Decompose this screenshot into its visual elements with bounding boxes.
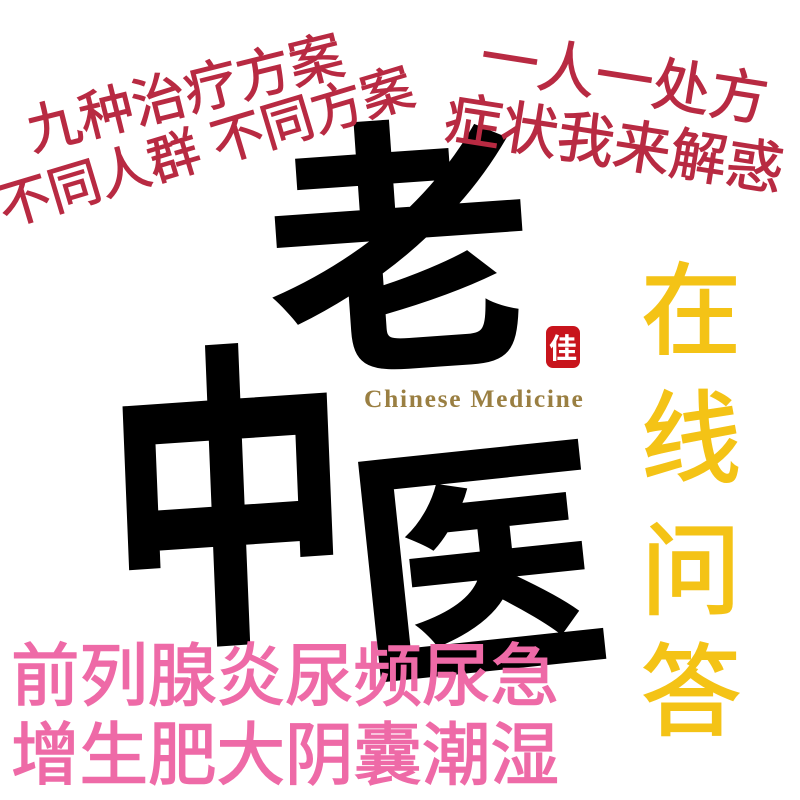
character: 问: 问 (641, 516, 741, 628)
red slogan: nine treatment plans: 九种治疗方案 (21, 26, 350, 162)
red slogan: different people, different plans: 不同人群 不同方案 (0, 59, 421, 238)
calligraphy: 老: 老 (252, 29, 546, 435)
character: 线: 线 (641, 384, 741, 496)
pink text line 2: 增生肥大阴囊潮湿 (11, 717, 559, 794)
calligraphy: 医: 医 (329, 349, 622, 742)
pink text line 1: 前列腺炎尿频尿急 (11, 638, 559, 715)
yellow vertical heading: online Q&A (641, 256, 741, 749)
character: 答: 答 (641, 637, 741, 749)
red seal: 佳 (549, 327, 577, 367)
red slogan: symptoms explained: 症状我来解惑 (440, 86, 788, 203)
character: 在: 在 (641, 256, 741, 368)
calligraphy: 中: 中 (96, 239, 359, 716)
english subtitle: Chinese Medicine (364, 384, 585, 413)
red slogan: one prescription per person: 一人一处方 (476, 24, 773, 134)
